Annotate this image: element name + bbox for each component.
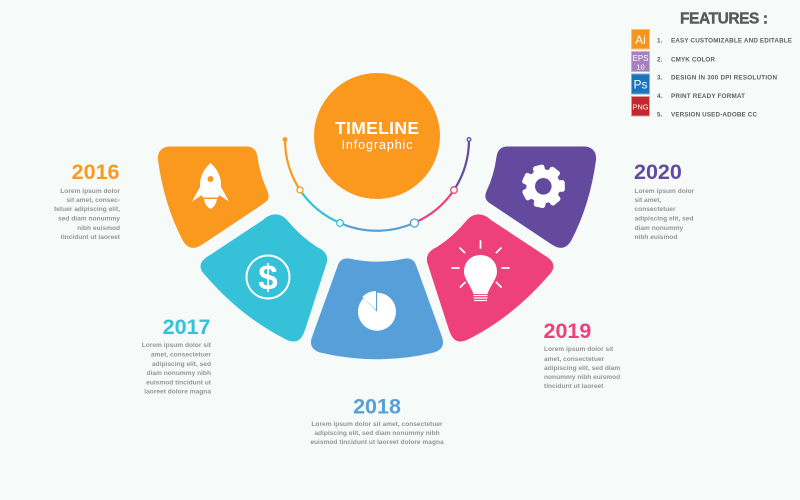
icon: Ps badge — [632, 74, 650, 94]
features list — [657, 38, 792, 118]
text block: 2019: nonummy nibh euismod — [544, 374, 620, 381]
title: TIMELINE — [335, 118, 419, 138]
text block: 2019 — [544, 319, 620, 390]
text block: 2016: tincidunt ut laoreet — [61, 234, 121, 241]
text block: 2019: 2019 — [544, 319, 591, 343]
text block: 2017: euismod tincidunt ut — [146, 380, 212, 386]
icon: EPS badge: EPS — [632, 54, 649, 63]
text block: 2017: adipiscing elit, sed — [152, 361, 211, 368]
icon: dollar coin: $ — [258, 258, 278, 298]
text block: 2017: diam nonummy nibh — [147, 370, 211, 377]
timeline arc with nodes — [283, 137, 471, 231]
text block: 2016: 2016 — [72, 160, 120, 184]
panel: 2017 cyan segment — [201, 214, 327, 342]
features list: PRINT READY FORMAT — [671, 93, 745, 100]
text block: 2016 — [54, 160, 121, 241]
text block: 2016: sed diam nonummy — [58, 216, 120, 222]
text block: 2019: Lorem ipsum dolor sit — [544, 346, 614, 353]
icon: Ai badge: Ai — [635, 33, 646, 47]
text block: 2019: adipiscing elit, sed diam — [544, 365, 620, 372]
text block: 2018: Lorem ipsum dolor sit amet, consectetuer — [311, 421, 443, 428]
text block: 2016: Lorem ipsum dolor — [60, 188, 120, 195]
text block: 2016: nibh euismod — [77, 225, 120, 232]
text block: 2020: sit amet, — [634, 197, 661, 204]
text block: 2020: 2020 — [634, 160, 682, 184]
icon: dollar coin — [246, 256, 290, 298]
text block: 2018 — [310, 394, 444, 446]
panel: 2020 purple segment — [485, 146, 596, 248]
text block: 2019: tincidunt ut laoreet — [544, 383, 604, 390]
text block: 2017: amet, consectetuer — [151, 352, 211, 358]
text block: 2018: adipiscing elit, sed diam nonummy nibh — [314, 430, 440, 437]
icon: pie chart — [358, 291, 396, 331]
text block: 2017: 2017 — [163, 315, 211, 339]
icon: Ps badge: Ps — [633, 78, 648, 92]
heading: features: FEATURES : — [680, 10, 768, 28]
central circle with title — [314, 73, 440, 199]
text block: 2016: tetuer adipiscing elit, — [54, 206, 120, 213]
text block: 2020 — [634, 160, 695, 241]
features list: 3. — [657, 74, 663, 82]
features list: 5. — [657, 112, 663, 118]
features list: EASY CUSTOMIZABLE AND EDITABLE — [671, 38, 792, 44]
panel: 2018 blue segment — [311, 258, 443, 359]
features list: 4. — [657, 93, 663, 100]
text block: 2020: consectetuer — [634, 206, 676, 213]
text block: 2016: sit amet, consec- — [66, 197, 120, 204]
text block: 2020: diam nonummy — [634, 225, 684, 232]
text block: 2020: Lorem ipsum dolor — [634, 188, 695, 195]
text block: 2018: 2018 — [353, 394, 401, 418]
text block: 2017: Lorem ipsum dolor sit — [142, 342, 212, 349]
icon: light bulb — [452, 241, 509, 300]
icon: rocket — [192, 163, 229, 209]
text block: 2017 — [142, 315, 212, 396]
icon: EPS badge: 10 — [636, 62, 645, 72]
icon: PNG badge — [632, 96, 650, 116]
panel: 2016 orange segment — [158, 146, 269, 248]
features list: VERSION USED-ADOBE CC — [671, 112, 757, 118]
panel: 2019 pink segment — [427, 214, 553, 342]
subtitle: Infographic — [342, 138, 412, 152]
features list: DESIGN IN 300 DPI RESOLUTION — [671, 74, 777, 82]
features list: 1. — [657, 38, 663, 44]
text block: 2020: adipiscing elit, sed — [634, 216, 694, 222]
icon: PNG badge: PNG — [632, 102, 649, 112]
text block: 2019: amet, consectetuer — [544, 356, 605, 363]
text block: 2017: laoreet dolore magna — [144, 388, 211, 396]
features list: 2. — [657, 56, 663, 64]
text block: 2020: nibh euismod — [634, 234, 677, 241]
icon: gear — [517, 160, 570, 213]
features list: CMYK COLOR — [671, 56, 715, 64]
icon: EPS badge — [632, 52, 650, 72]
text block: 2018: euismod tincidunt ut laoreet dolore magna — [310, 439, 444, 446]
icon: Ai badge — [632, 30, 650, 49]
